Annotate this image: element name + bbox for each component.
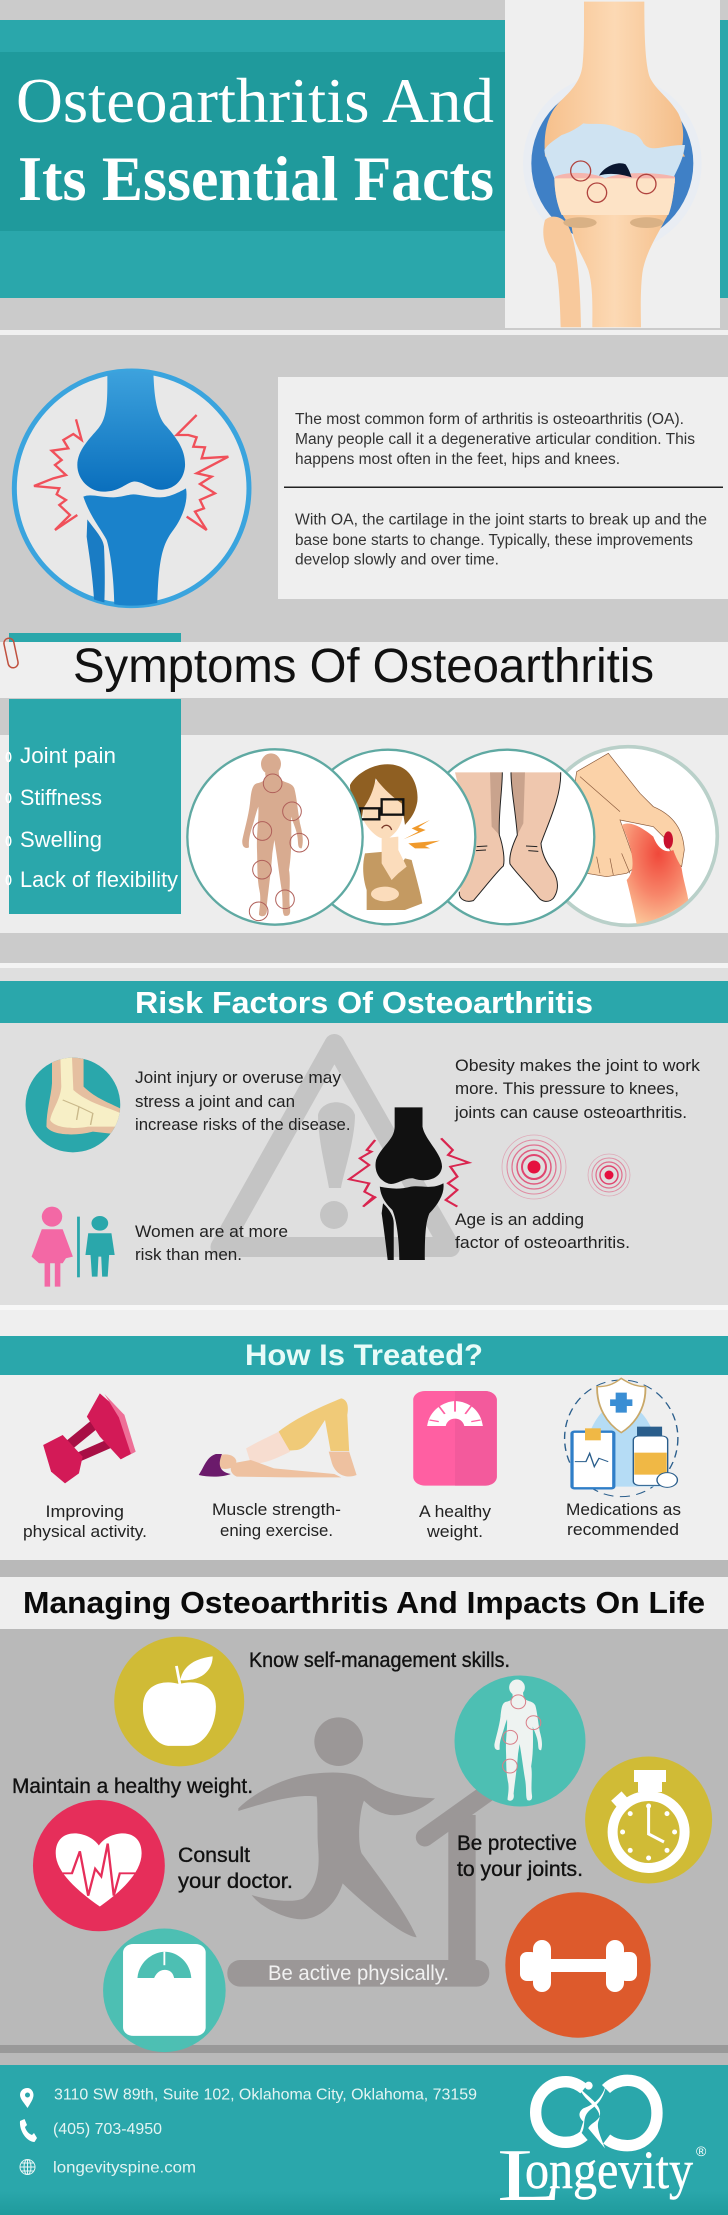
title [16, 65, 494, 214]
cartilage [544, 123, 685, 178]
text: managing labels: your doctor. [178, 1870, 293, 1893]
text: treatment labels [23, 1500, 681, 1541]
text: managing labels: Know self-management skills. [249, 1649, 510, 1672]
text: managing labels [12, 1649, 583, 1893]
heading: managing [0, 1577, 728, 1629]
text: treatment labels: A healthy [419, 1502, 492, 1521]
icon: globe [20, 2160, 35, 2174]
text: managing labels: Be protective [457, 1832, 577, 1855]
text: paragraph one [295, 411, 695, 468]
text: contact details: (405) 703-4950 [53, 2121, 162, 2138]
text: contact details: longevityspine.com [53, 2160, 196, 2176]
text: treatment labels: Improving [46, 1502, 124, 1521]
text: paragraph one: The most common form of arthritis is osteoarthritis (OA). [295, 411, 684, 428]
text: risk right: factor of osteoarthritis. [455, 1233, 630, 1252]
icon: white scale [103, 1929, 226, 2052]
icon: bridge exercise [199, 1398, 357, 1477]
text: managing labels: Consult [178, 1844, 250, 1867]
text: treatment labels: physical activity. [23, 1522, 147, 1541]
text: risk left: stress a joint and can [135, 1092, 295, 1111]
panel: symptom list: Swelling [20, 827, 102, 852]
icon: location pin [20, 2088, 34, 2108]
text: risk left: increase risks of the disease. [135, 1115, 350, 1134]
icon: stopwatch [585, 1756, 712, 1884]
text: paragraph one: happens most often in the feet, hips and knees. [295, 451, 620, 468]
icon: ankle [26, 1057, 123, 1152]
panel: managing osteoarthritis [0, 1560, 728, 2065]
panel: symptom list [6, 699, 181, 914]
panel: footer [0, 2065, 728, 2215]
femur [545, 2, 685, 157]
illustration: knee pain circle [565, 744, 720, 928]
text: risk left [135, 1068, 350, 1264]
panel: symptom list: Lack of flexibility [20, 867, 178, 892]
text: managing labels: Maintain a healthy weight. [12, 1775, 253, 1798]
text: risk right: joints can cause osteoarthritis. [454, 1103, 687, 1122]
title: Osteoarthritis And [16, 65, 494, 136]
logo: Longevity: L [497, 2135, 562, 2215]
text: risk left: Women are at more [135, 1222, 288, 1241]
text: risk right [454, 1056, 701, 1252]
heading: risk factors: Risk Factors Of Osteoarthritis [135, 985, 593, 1020]
panel: knee illustration [505, 0, 720, 328]
inflammation rings [571, 161, 656, 202]
text: contact details: 3110 SW 89th, Suite 102, Oklahoma City, Oklahoma, 73159 [54, 2086, 477, 2104]
heading: managing: Managing Osteoarthritis And Impacts On Life [23, 1585, 705, 1620]
panel: risk factors [0, 968, 728, 1305]
icon: woman and man [32, 1207, 115, 1287]
heading: how is treated [0, 1336, 728, 1375]
bone defect [599, 163, 632, 177]
text: contact details [53, 2086, 477, 2176]
icon: pink scale [413, 1391, 497, 1486]
logo: Longevity: ongevity [525, 2140, 693, 2200]
icon: heart [33, 1800, 165, 1931]
icon: phone [20, 2119, 37, 2142]
icon: dumbbell [43, 1393, 136, 1483]
panel: treatment [0, 1310, 728, 1560]
icon: pain targets [502, 1135, 630, 1199]
tibia [554, 178, 675, 327]
panel: title banner [0, 20, 728, 298]
text: treatment labels: Muscle strength- [212, 1500, 341, 1519]
text: paragraph two: develop slowly and over time. [295, 552, 499, 568]
icon: blue knee joint [14, 370, 249, 607]
text: treatment labels: Medications as [566, 1500, 681, 1519]
heading: how is treated: How Is Treated? [245, 1339, 483, 1372]
panel: symptom list: Stiffness [20, 785, 102, 810]
fibula [543, 217, 581, 327]
heading: symptoms: Symptoms Of Osteoarthritis [73, 640, 654, 693]
icon: body figure [454, 1676, 586, 1806]
heading: risk factors [0, 981, 728, 1023]
text: treatment labels: ening exercise. [220, 1521, 333, 1540]
text: risk left: risk than men. [135, 1245, 242, 1264]
illustration: body joints circle [187, 749, 363, 925]
logo: Longevity: ® [696, 2143, 707, 2159]
text: treatment labels: weight. [426, 1522, 483, 1541]
text: risk right: more. This pressure to knees, [455, 1079, 679, 1098]
panel: symptom list: Joint pain [20, 743, 116, 768]
text: risk right: Obesity makes the joint to work [455, 1056, 701, 1075]
text: paragraph one: Many people call it a degenerative articular condition. This [295, 431, 695, 448]
text: paragraph two [295, 512, 707, 568]
text: treatment labels: recommended [567, 1520, 679, 1539]
text: risk right: Age is an adding [455, 1210, 584, 1229]
text: be active: Be active physically. [268, 1962, 449, 1985]
icon: white dumbbell [505, 1892, 651, 2038]
text: risk left: Joint injury or overuse may [135, 1068, 342, 1087]
panel: symptoms section [0, 633, 728, 933]
title: Its Essential Facts [18, 143, 494, 214]
icon: paperclip [3, 637, 19, 669]
text: managing labels: to your joints. [457, 1858, 583, 1881]
logo: Longevity [497, 2080, 707, 2215]
illustration: swollen feet circle [448, 748, 596, 926]
figure: runner and path [227, 1717, 489, 1987]
icon: medication [565, 1378, 678, 1497]
icon: black knee joint [349, 1107, 469, 1260]
illustration: shoulder pain circle [332, 748, 476, 926]
text: paragraph two: With OA, the cartilage in the joint starts to break up and the [295, 512, 707, 528]
icon: warning triangle [220, 1044, 450, 1247]
text: paragraph two: base bone starts to change. Typically, these improvements [295, 532, 693, 549]
panel: introduction text [278, 377, 728, 599]
icon: apple [114, 1637, 244, 1766]
